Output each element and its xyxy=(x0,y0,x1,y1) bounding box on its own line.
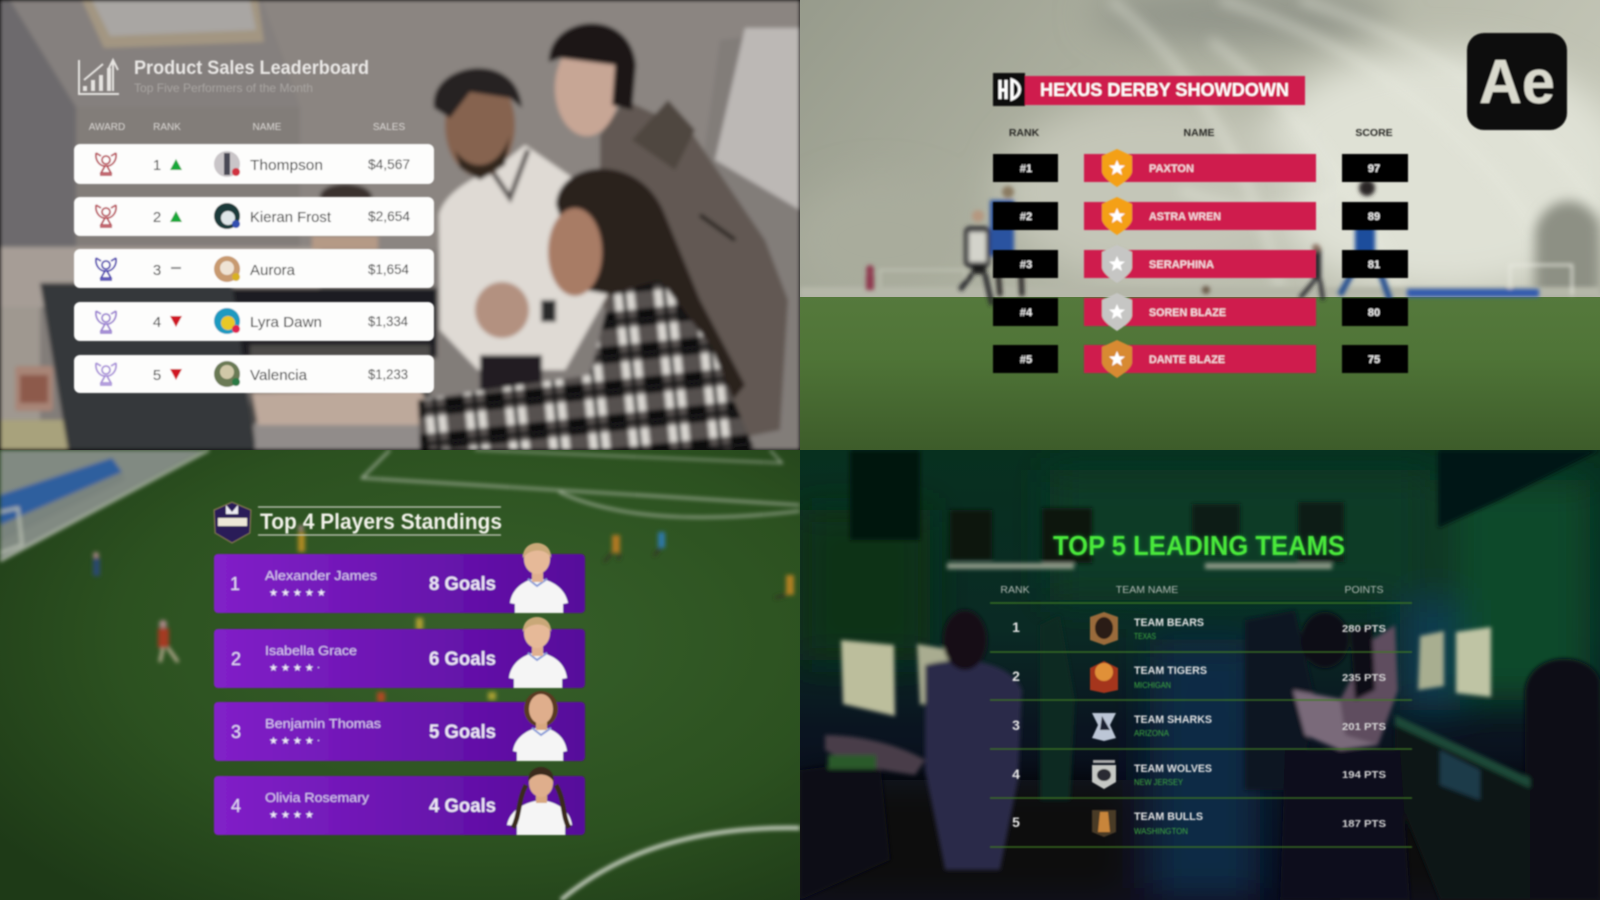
player row 4: 4 Goals xyxy=(429,796,496,817)
team row 3: 201 PTS xyxy=(1342,721,1386,733)
row 4: $1,334 xyxy=(368,313,408,329)
panel: hexus derby showdown xyxy=(790,0,1600,450)
team row 5 xyxy=(1012,810,1386,837)
team row 5: WASHINGTON xyxy=(1134,826,1188,836)
team row 3: 3 xyxy=(1012,717,1020,733)
table header: RANK xyxy=(1009,127,1040,139)
table header xyxy=(1000,584,1384,596)
front woman face xyxy=(548,208,602,296)
team row 2: 235 PTS xyxy=(1342,672,1386,684)
row 1: Thompson xyxy=(250,157,323,174)
banner logo xyxy=(993,73,1025,106)
table header: RANK xyxy=(1000,584,1030,596)
team row 1 xyxy=(1012,612,1386,645)
row 2: $2,654 xyxy=(368,208,410,224)
ceiling speakers xyxy=(950,510,992,560)
table header: POINTS xyxy=(1344,584,1384,596)
row 3: Aurora xyxy=(250,262,296,279)
team row 1: TEAM BEARS xyxy=(1134,617,1204,629)
row 3: $1,654 xyxy=(368,261,409,277)
player row 3 xyxy=(214,691,585,761)
row 4: 4 xyxy=(153,314,161,331)
text group xyxy=(993,33,1567,378)
row 5: 75 xyxy=(1368,354,1380,366)
row 2: Kieran Frost xyxy=(250,209,332,226)
woman head xyxy=(555,40,619,136)
player row 2: 2 xyxy=(231,649,241,669)
team row 2 xyxy=(1012,661,1386,693)
row 3: #3 xyxy=(1020,259,1032,271)
team row 5: 5 xyxy=(1012,814,1020,830)
icon: silver shield xyxy=(1102,293,1132,331)
row 1: $4,567 xyxy=(368,156,410,172)
man head xyxy=(444,90,516,174)
plaid jacket xyxy=(418,280,755,450)
row 5: Valencia xyxy=(250,367,308,384)
text group xyxy=(990,530,1412,847)
team row 2: 2 xyxy=(1012,668,1020,684)
table header: TEAM NAME xyxy=(1116,584,1178,596)
row 3: 81 xyxy=(1368,259,1380,271)
player row 4: ★★★★ xyxy=(269,810,317,821)
team row 3: TEAM SHARKS xyxy=(1134,714,1212,726)
right player xyxy=(1293,690,1378,750)
player row 3: ★★★★⋅ xyxy=(269,736,323,747)
table header: SALES xyxy=(373,122,405,133)
desks xyxy=(1395,715,1530,900)
row 3: 3 xyxy=(153,262,161,279)
heading: Top 4 Players Standings xyxy=(260,509,502,534)
table header: NAME xyxy=(1184,127,1214,139)
player row 3: 3 xyxy=(231,722,241,742)
team row 2: MICHIGAN xyxy=(1134,680,1171,690)
team row 1: 280 PTS xyxy=(1342,623,1386,635)
team row 2: TEAM TIGERS xyxy=(1134,665,1207,677)
text group xyxy=(74,58,434,393)
row 2 xyxy=(74,197,434,236)
team row 3: ARIZONA xyxy=(1134,728,1169,738)
left player xyxy=(925,660,1022,870)
player photo xyxy=(510,543,568,613)
row 5: $1,233 xyxy=(368,366,408,382)
title banner xyxy=(993,73,1305,106)
icon: bar chart growth xyxy=(79,60,119,94)
row 5: DANTE BLAZE xyxy=(1149,354,1225,366)
lights xyxy=(947,563,1074,569)
player photo xyxy=(509,617,567,688)
icon: After Effects badge xyxy=(1467,33,1567,130)
goal frames xyxy=(880,270,965,287)
row 5 xyxy=(993,340,1408,378)
players xyxy=(93,525,794,702)
row 4: #4 xyxy=(1020,307,1033,319)
icon: bronze shield xyxy=(1102,340,1132,378)
player row 1 xyxy=(214,543,585,613)
row 2: 89 xyxy=(1368,211,1380,223)
soccer field background xyxy=(0,450,800,900)
subtitle: Top Five Performers of the Month xyxy=(134,81,313,95)
man sweater xyxy=(439,145,610,370)
row 5 xyxy=(74,355,434,393)
player row 1: Alexander James xyxy=(265,569,377,583)
row 3 xyxy=(993,245,1408,283)
title: Product Sales Leaderboard xyxy=(134,58,369,79)
hand holding mug xyxy=(475,282,529,338)
team row 1: 1 xyxy=(1012,619,1020,635)
row 1 xyxy=(74,144,434,184)
table header: NAME xyxy=(253,122,282,133)
team row 5: 187 PTS xyxy=(1342,818,1386,830)
icon: After Effects badge: Ae xyxy=(1479,48,1555,117)
logo: wolves xyxy=(1092,760,1116,789)
player row 2 xyxy=(214,617,585,688)
players xyxy=(866,265,874,290)
row dividers xyxy=(990,603,1412,847)
row 2 xyxy=(993,197,1408,235)
table header xyxy=(88,122,406,131)
player row 1: 8 Goals xyxy=(429,574,496,595)
row 4: Lyra Dawn xyxy=(250,314,322,331)
player row 4: Olivia Rosemary xyxy=(265,791,370,805)
logo: tigers xyxy=(1090,661,1118,693)
row 5: 5 xyxy=(153,367,161,384)
table header: AWARD xyxy=(89,122,125,133)
blazer xyxy=(600,100,788,450)
title: TOP 5 LEADING TEAMS xyxy=(1053,530,1345,561)
row 5: #5 xyxy=(1020,354,1032,366)
row 3: SERAPHINA xyxy=(1149,259,1214,271)
row 2: 2 xyxy=(153,209,161,226)
logo: bears xyxy=(1090,612,1118,645)
chair between players xyxy=(1040,615,1075,800)
monitors xyxy=(841,640,895,716)
team row 3 xyxy=(1012,713,1386,741)
title banner: HEXUS DERBY SHOWDOWN xyxy=(1040,80,1289,100)
text group xyxy=(214,502,585,835)
icon: silver shield xyxy=(1102,245,1132,283)
player photo xyxy=(507,767,572,835)
table header xyxy=(1008,128,1394,137)
row 1 xyxy=(993,149,1408,187)
front woman hair xyxy=(553,166,746,400)
icon: gold shield xyxy=(1102,149,1132,187)
player row 1: 1 xyxy=(230,574,240,594)
team row 4: TEAM WOLVES xyxy=(1134,763,1212,775)
team row 1: TEXAS xyxy=(1134,631,1156,641)
table header: RANK xyxy=(153,122,181,133)
player row 3: 5 Goals xyxy=(429,722,496,743)
player row 2: 6 Goals xyxy=(429,649,496,670)
team row 5: TEAM BULLS xyxy=(1134,811,1203,823)
row 1: PAXTON xyxy=(1149,163,1194,175)
row 1: 97 xyxy=(1368,163,1380,175)
table header: SCORE xyxy=(1355,127,1393,139)
player row 3: Benjamin Thomas xyxy=(265,717,381,731)
logo: bulls xyxy=(1092,810,1116,837)
team row 4 xyxy=(1012,760,1386,789)
title: TOP 5 LEADING TEAMS xyxy=(1053,530,1345,561)
row 2: #2 xyxy=(1020,211,1032,223)
icon: gold shield xyxy=(1102,197,1132,235)
row 1: #1 xyxy=(1020,163,1032,175)
bench xyxy=(1407,289,1539,297)
team row 4: 4 xyxy=(1012,766,1020,782)
player row 4 xyxy=(214,767,585,835)
player row 4: 4 xyxy=(231,796,241,816)
player photo xyxy=(513,691,567,761)
row 4: 80 xyxy=(1368,307,1380,319)
panel: top 5 leading teams xyxy=(800,450,1600,900)
row 4 xyxy=(993,293,1408,331)
row 3 xyxy=(74,249,434,288)
logo: sharks xyxy=(1092,713,1116,741)
row 2: ASTRA WREN xyxy=(1149,211,1221,223)
row 1: 1 xyxy=(153,157,161,174)
chairs right xyxy=(1525,659,1600,900)
row 4 xyxy=(74,302,434,341)
player row 2: Isabella Grace xyxy=(265,644,357,658)
row 4: SOREN BLAZE xyxy=(1149,307,1226,319)
team row 4: NEW JERSEY xyxy=(1134,777,1183,787)
team row 4: 194 PTS xyxy=(1342,769,1386,781)
player row 1: ★★★★★ xyxy=(269,588,329,599)
indoor dome photo background xyxy=(790,0,1600,450)
esports arena background xyxy=(800,450,1600,900)
office photo background xyxy=(0,0,800,450)
player row 2: ★★★★⋅ xyxy=(269,663,323,674)
panel: top 4 players standings xyxy=(0,450,800,900)
panel: product sales leaderboard xyxy=(0,0,800,450)
league badge xyxy=(214,502,251,543)
